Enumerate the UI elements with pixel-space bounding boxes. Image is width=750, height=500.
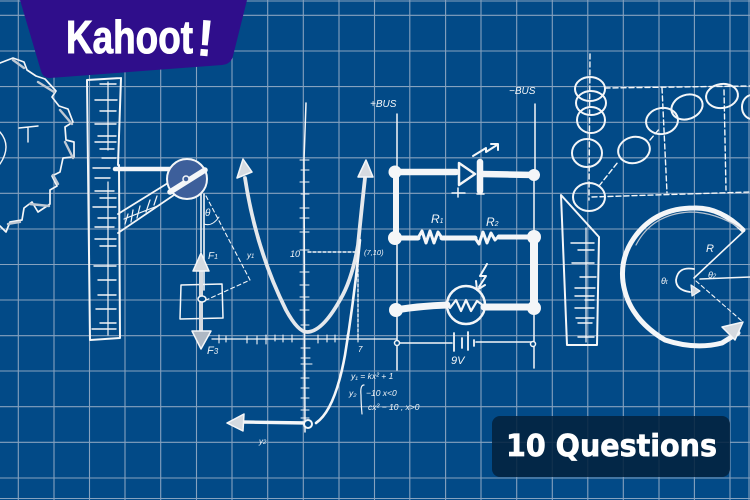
circuit: battery: 9V [451,355,466,367]
curve y2 [227,240,360,431]
circular motion arc: letter c: R [706,243,714,255]
force labels: θ [205,208,211,219]
equations [348,371,420,414]
circuit: photoresistor branch [389,264,541,324]
Kahoot logo wordmark: ! [194,9,216,69]
circuit bus labels [370,86,536,110]
graph labels: y2 [258,437,267,446]
circular motion arc: letter c: θ2 [708,270,717,280]
circuit bus lines [397,104,535,370]
parabola y1 [237,159,373,332]
circuit: battery [394,332,536,367]
graph labels: (7,10) [364,248,384,257]
circuit: resistor branch [388,172,541,310]
hanging block with force arrows [180,196,250,349]
question count badge [492,416,730,477]
circular motion arc: letter c: θt [661,276,668,286]
force labels [205,208,254,357]
Kahoot logo wordmark: Kahoot [66,11,193,63]
circuit: LED branch [388,144,540,197]
force labels: F3 [207,345,219,357]
logo banner [20,0,247,78]
pulley arm and incline [115,159,207,290]
graph axes [212,103,397,432]
circuit bus labels: +BUS [370,99,397,110]
circular motion arc: letter c [622,208,750,346]
equations: y₁ = kx² + 1 [350,371,394,381]
question count badge: 10 Questions [506,429,717,464]
gear sketch [0,58,74,232]
ruler: letter h stem [87,78,121,340]
circuit: resistor branch: R2 [486,215,499,229]
wedge ruler: letter i [561,195,599,345]
graph labels [258,248,384,446]
equations: y₂ [348,388,357,398]
circuit bus labels: −BUS [509,86,536,97]
graph labels: 7 [358,345,363,354]
equations: cx² − 10 , x>0 [368,402,420,412]
particle trajectory circles [572,54,750,211]
force labels: y1 [246,251,254,260]
circuit: resistor branch: R1 [431,212,444,226]
equations: −10 x<0 [366,388,397,398]
force labels: F1 [208,251,218,262]
graph labels: 10 [290,249,300,259]
